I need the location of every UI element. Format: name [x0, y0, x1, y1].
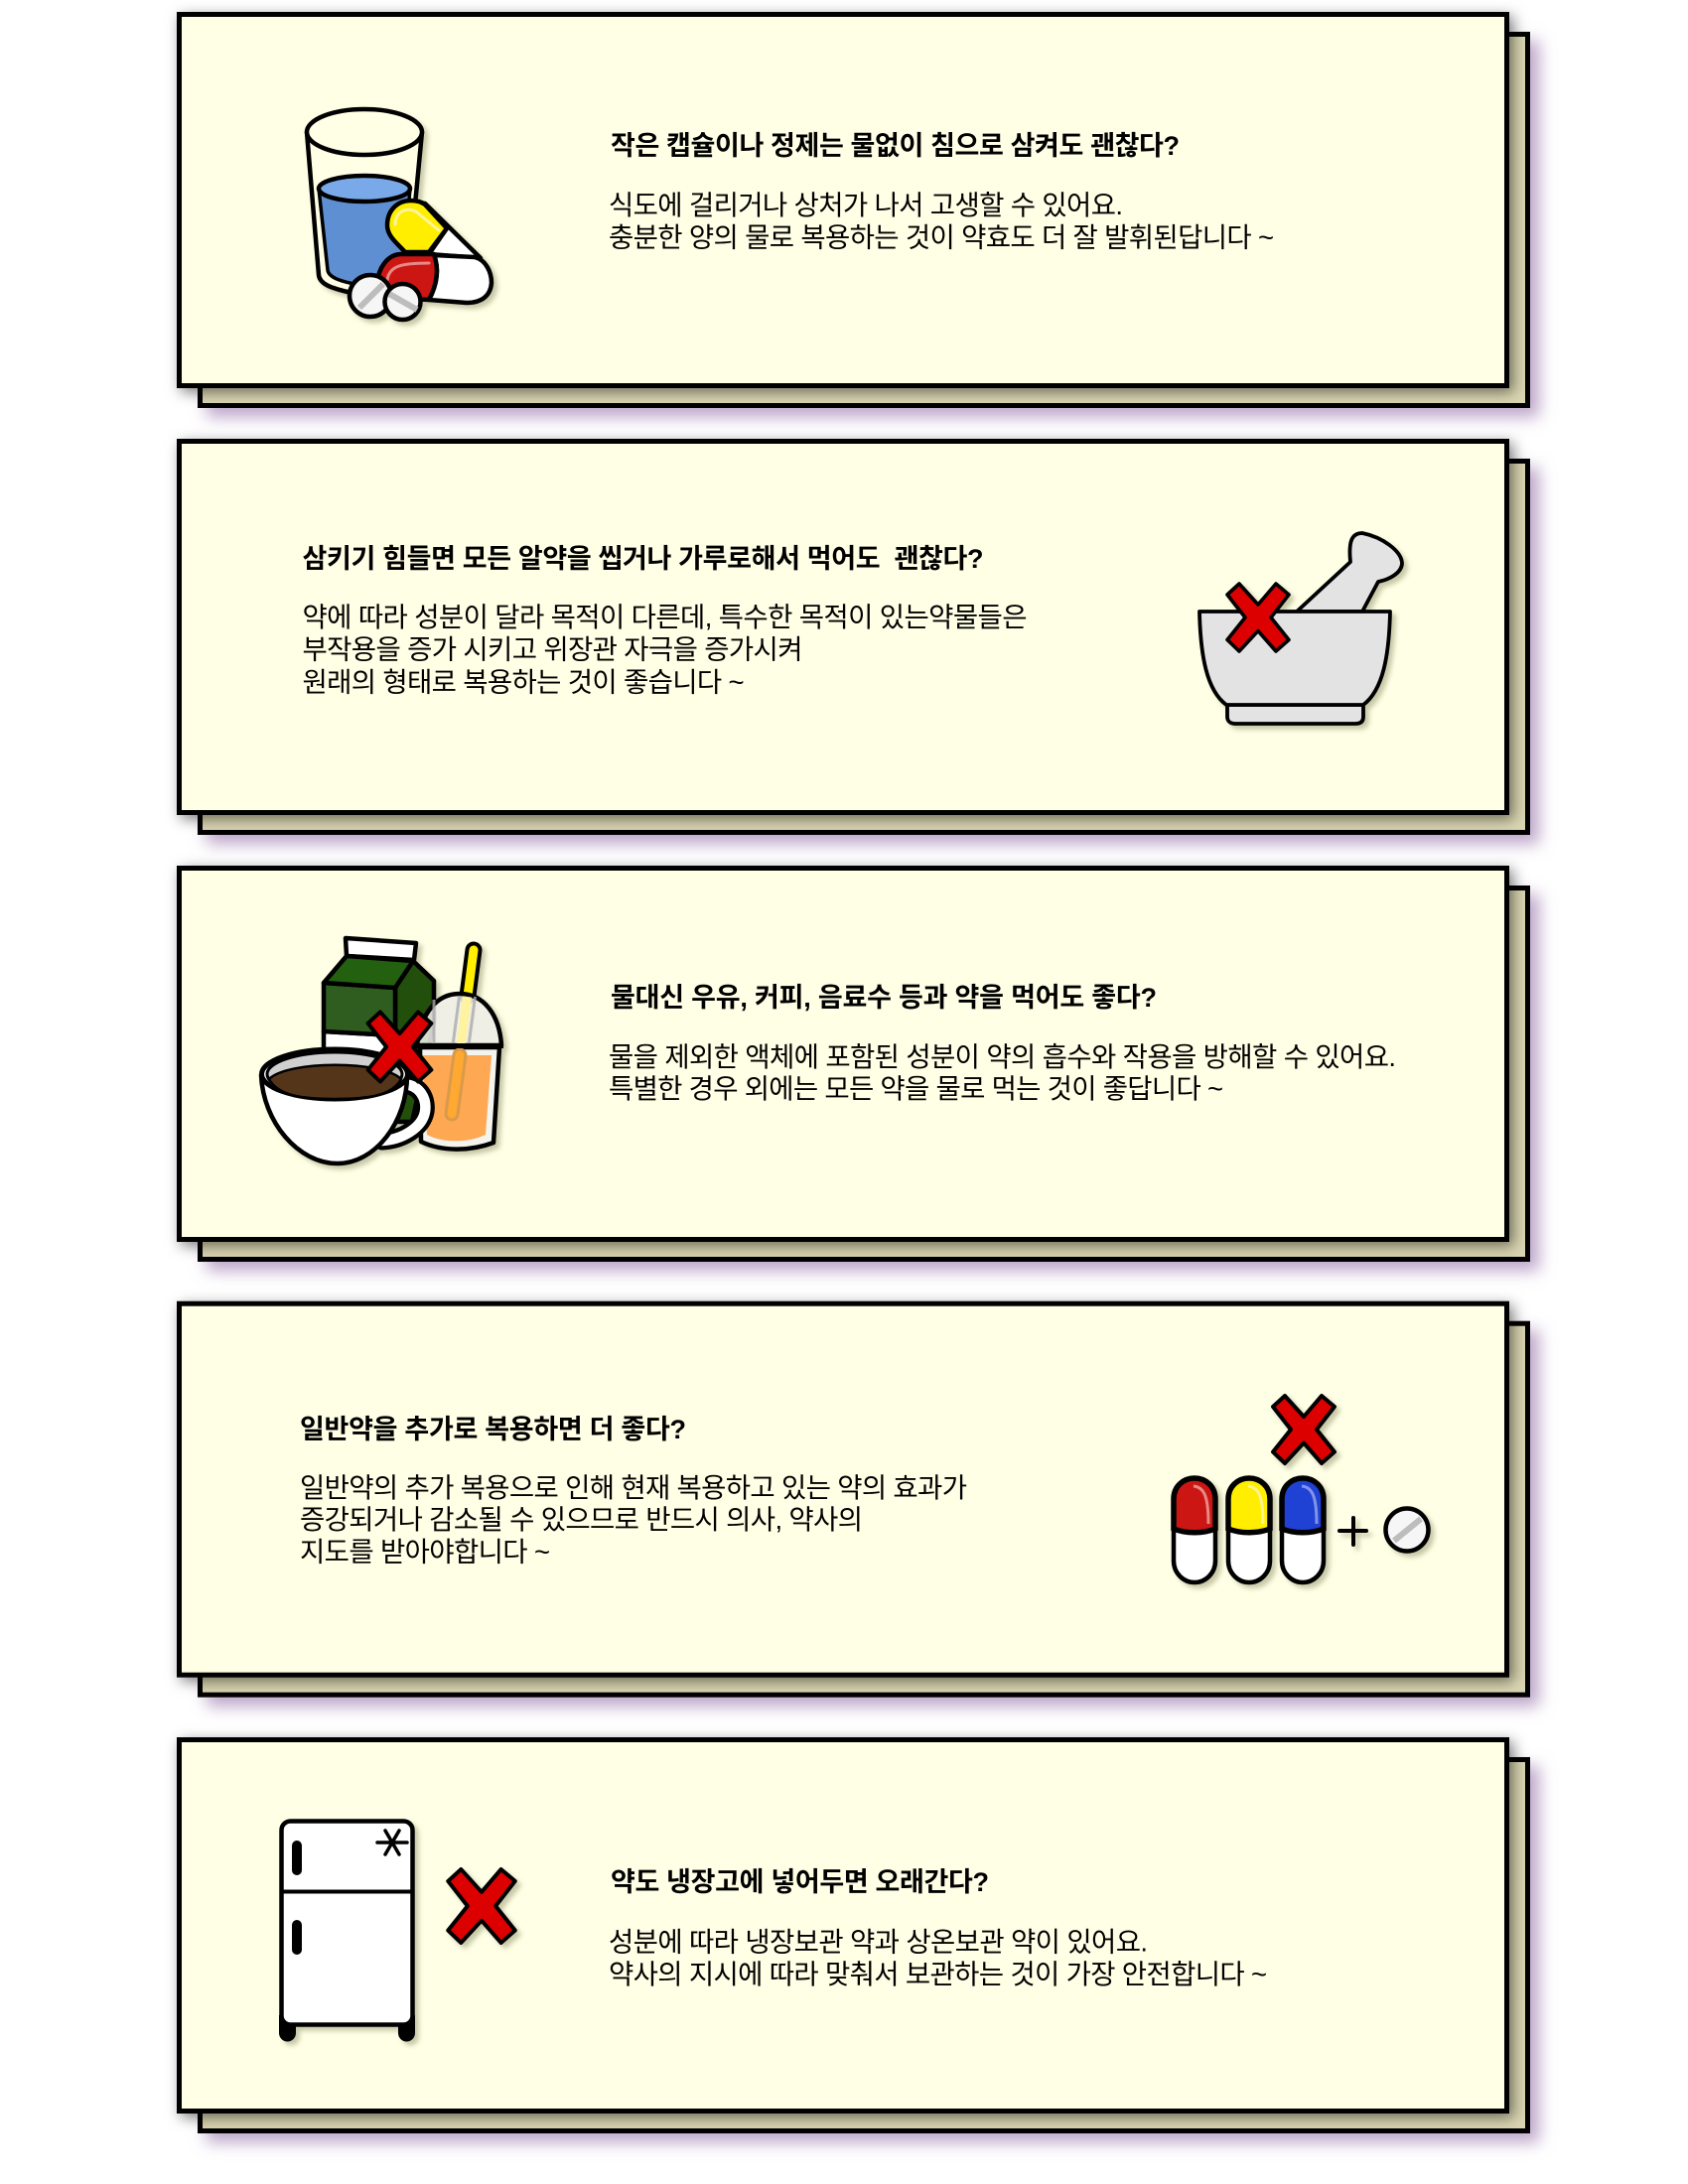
back card: [201, 887, 1527, 1259]
body text: 원래의 형태로 복용하는 것이 좋습니다 ~: [302, 667, 745, 697]
panel 2: crushing pills: [179, 441, 1527, 832]
back card: [201, 34, 1527, 405]
back card: [201, 461, 1527, 832]
body text: [609, 1041, 1396, 1104]
body text: 부작용을 증가 시키고 위장관 자극을 증가시켜: [302, 633, 802, 665]
body text: [609, 190, 1274, 252]
heading: 약도 냉장고에 넣어두면 오래간다?: [611, 1867, 989, 1897]
body text: 약에 따라 성분이 달라 목적이 다른데, 특수한 목적이 있는약물들은: [302, 602, 1027, 632]
front card: [179, 441, 1507, 812]
body text: 약사의 지시에 따라 맞춰서 보관하는 것이 가장 안전합니다 ~: [609, 1959, 1267, 1989]
heading: 물대신 우유, 커피, 음료수 등과 약을 먹어도 좋다?: [611, 983, 1157, 1013]
panel 1: swallowing without water: [179, 14, 1527, 405]
icon: milk, juice and coffee with red X: [261, 938, 503, 1163]
icon: refrigerator with red X: [279, 1821, 515, 2041]
body text: 지도를 받아야합니다 ~: [300, 1537, 550, 1567]
icon: three capsules plus tablet with red X: [1174, 1396, 1428, 1582]
heading: 작은 캡슐이나 정제는 물없이 침으로 삼켜도 괜찮다?: [611, 131, 1180, 161]
heading: 삼키기 힘들면 모든 알약을 씹거나 가루로해서 먹어도 괜찮다?: [302, 544, 983, 574]
front card: [179, 1303, 1507, 1675]
back card: [201, 1759, 1527, 2130]
panel 5: storing medicine in the fridge: [179, 1739, 1527, 2130]
body text: 식도에 걸리거나 상처가 나서 고생할 수 있어요.: [609, 190, 1123, 220]
icon: mortar and pestle with red X: [1199, 533, 1402, 724]
body text: 특별한 경우 외에는 모든 약을 물로 먹는 것이 좋답니다 ~: [609, 1073, 1223, 1104]
body text: [300, 1472, 967, 1567]
body text: 증강되거나 감소될 수 있으므로 반드시 의사, 약사의: [300, 1504, 863, 1535]
panel 3: drinks other than water: [179, 868, 1527, 1259]
icon: glass of water with pills: [307, 109, 492, 320]
front card: [179, 14, 1507, 385]
panel 4: extra over-the-counter medicine: [179, 1303, 1527, 1695]
body text: 일반약의 추가 복용으로 인해 현재 복용하고 있는 약의 효과가: [300, 1472, 967, 1503]
front card: [179, 868, 1507, 1239]
body text: [609, 1926, 1267, 1989]
heading: 일반약을 추가로 복용하면 더 좋다?: [300, 1415, 686, 1444]
body text: 성분에 따라 냉장보관 약과 상온보관 약이 있어요.: [609, 1926, 1148, 1958]
front card: [179, 1739, 1507, 2111]
body text: [302, 602, 1027, 697]
body text: 물을 제외한 액체에 포함된 성분이 약의 흡수와 작용을 방해할 수 있어요.: [609, 1041, 1396, 1072]
back card: [201, 1323, 1527, 1695]
body text: 충분한 양의 물로 복용하는 것이 약효도 더 잘 발휘된답니다 ~: [609, 222, 1274, 252]
